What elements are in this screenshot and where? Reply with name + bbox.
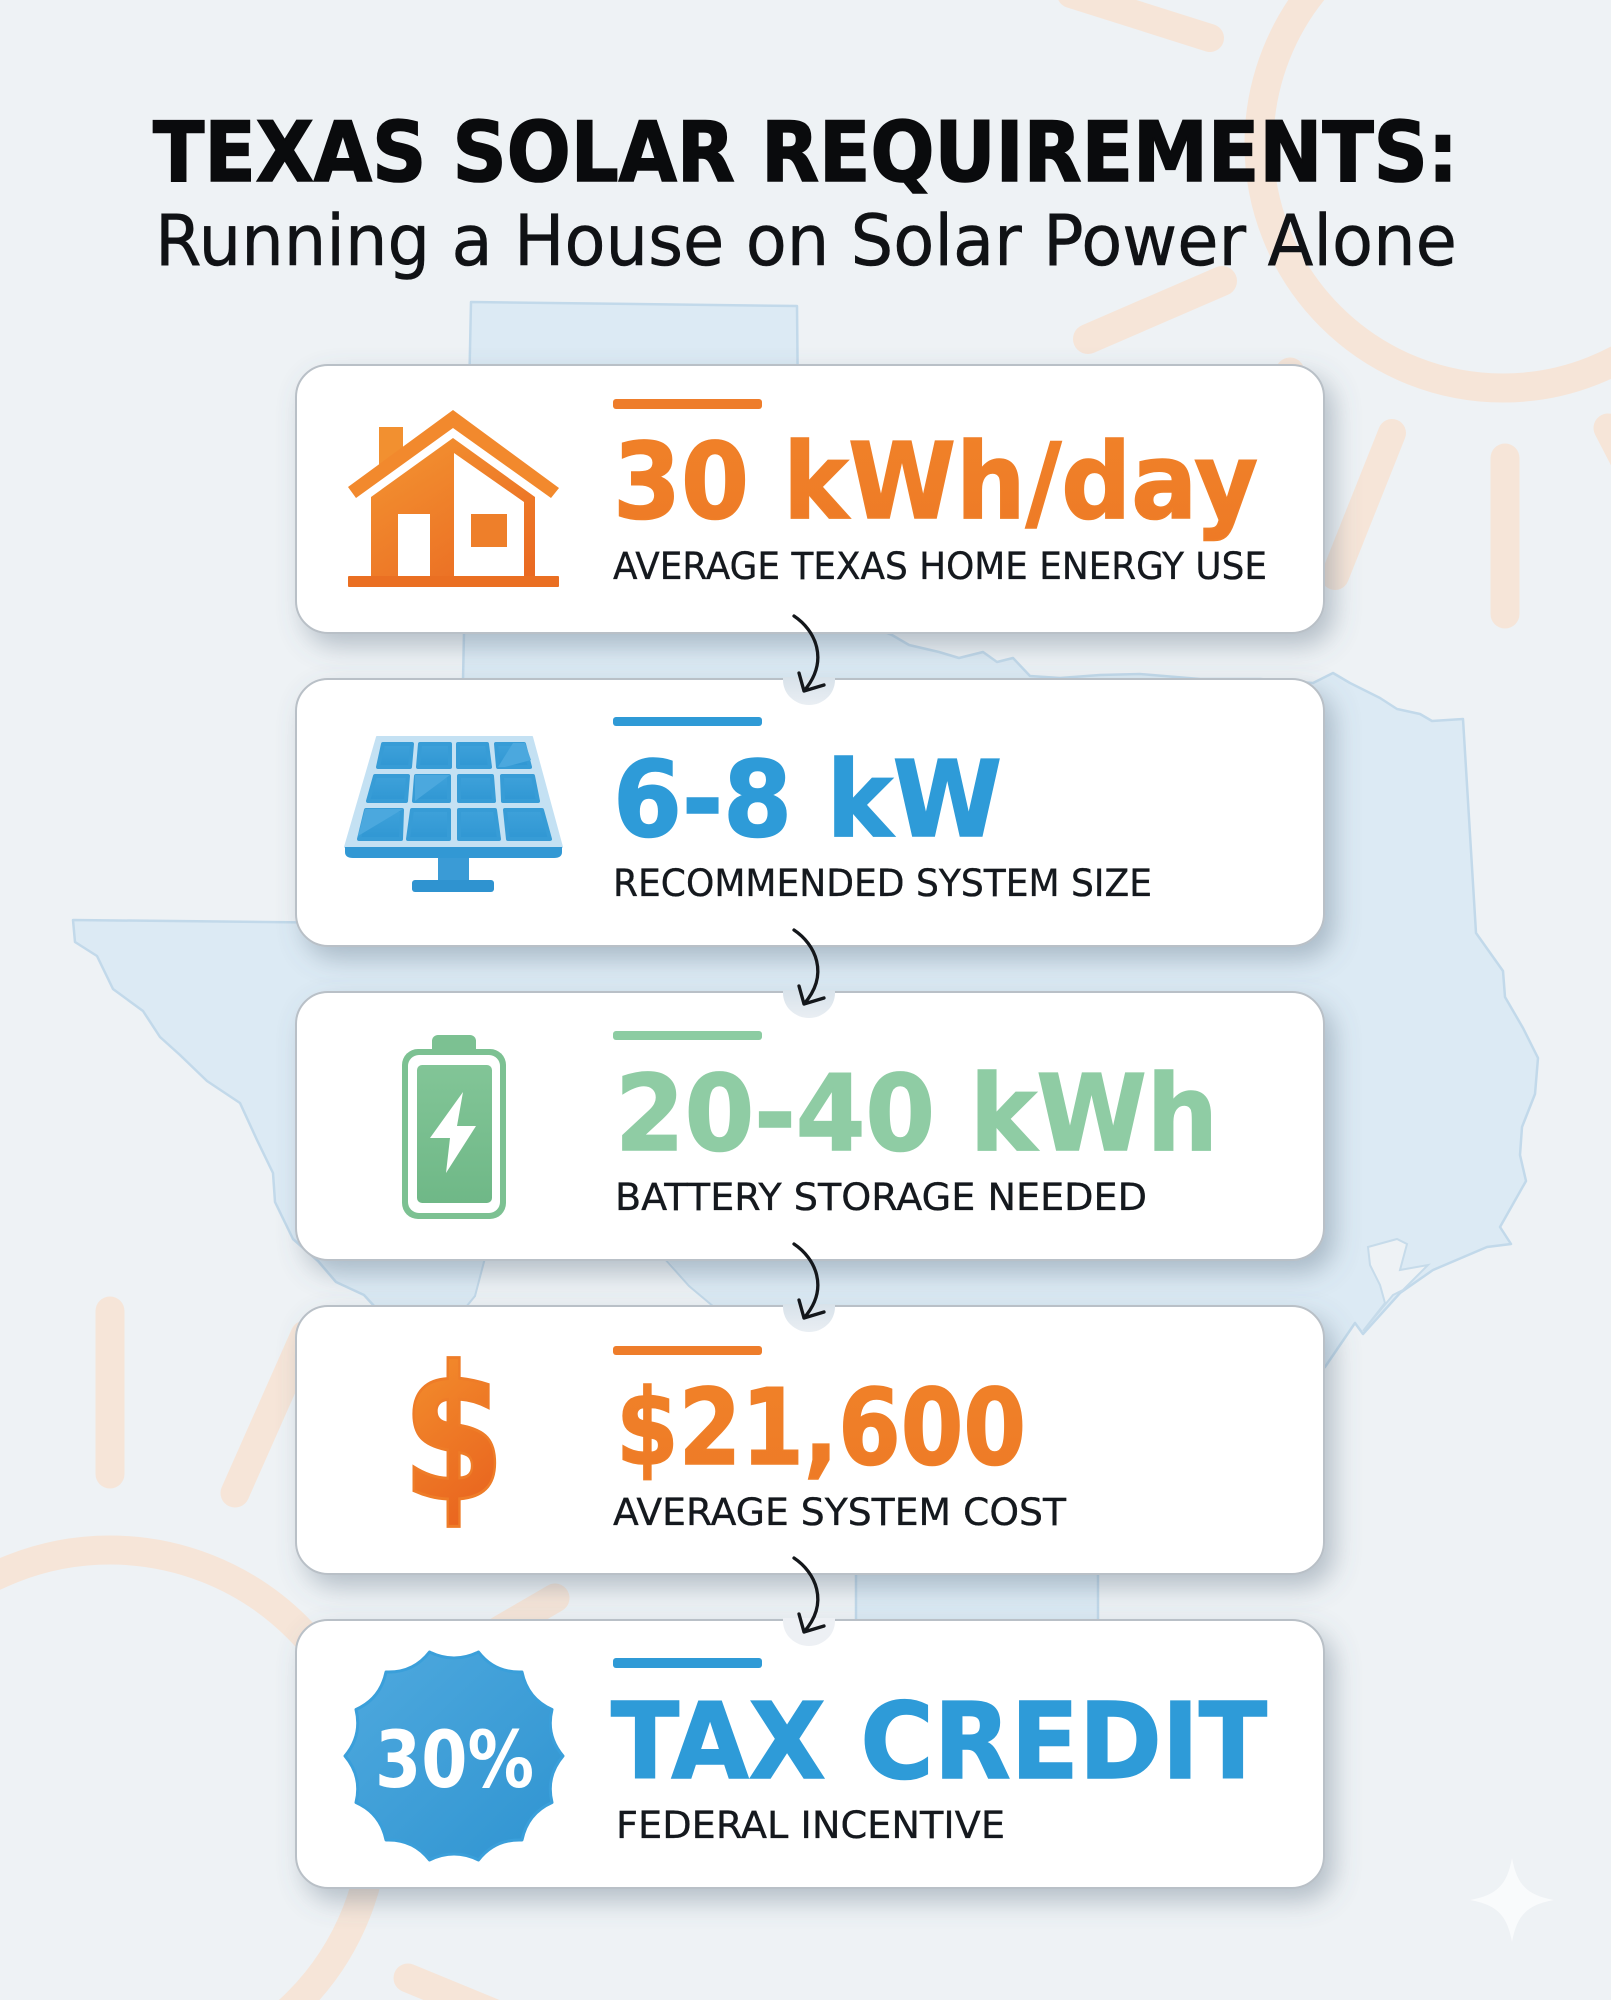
title — [153, 104, 1458, 282]
accent bar — [613, 1031, 762, 1040]
panel: energy use — [296, 365, 1324, 633]
icon: solar panel — [345, 737, 562, 892]
label: AVERAGE TEXAS HOME ENERGY USE — [613, 545, 1267, 588]
connector arrow 1 — [783, 616, 835, 705]
label: RECOMMENDED SYSTEM SIZE — [613, 862, 1152, 905]
accent bar — [613, 399, 762, 409]
title line 2: Running a House on Solar Power Alone — [155, 200, 1457, 282]
accent bar — [613, 1658, 762, 1668]
icon: battery — [402, 1035, 506, 1219]
decorative sun: top right — [1071, 0, 1611, 614]
icon: 30% badge: 30% — [375, 1716, 534, 1806]
watermark sparkle — [1470, 1858, 1554, 1942]
card background — [296, 365, 1324, 633]
title line 1: TEXAS SOLAR REQUIREMENTS: — [153, 104, 1458, 201]
card background — [296, 992, 1324, 1260]
panel: system cost — [296, 1306, 1324, 1574]
panel: system size — [296, 679, 1324, 946]
accent bar — [613, 1346, 762, 1355]
label: BATTERY STORAGE NEEDED — [615, 1176, 1147, 1219]
decorative sun: bottom left — [0, 1311, 555, 2000]
value: 6-8 kW — [613, 739, 1002, 861]
connector arrow 3 — [783, 1244, 835, 1332]
icon: house — [348, 410, 559, 587]
panel: battery storage — [296, 992, 1324, 1260]
connector arrow 4 — [783, 1558, 835, 1646]
value: $21,600 — [616, 1367, 1026, 1489]
panel: tax credit — [296, 1620, 1324, 1888]
card background — [296, 679, 1324, 946]
accent bar — [613, 717, 762, 726]
card background — [296, 1620, 1324, 1888]
label: FEDERAL INCENTIVE — [616, 1804, 1005, 1847]
value: 30 kWh/day — [613, 421, 1258, 543]
card background — [296, 1306, 1324, 1574]
background map: Texas outline — [73, 302, 1538, 1640]
icon: 30% badge — [345, 1652, 563, 1860]
icon: dollar sign: $ — [402, 1326, 505, 1543]
value: 20-40 kWh — [615, 1053, 1218, 1175]
connector arrow 2 — [783, 930, 835, 1018]
value: TAX CREDIT — [611, 1681, 1267, 1803]
label: AVERAGE SYSTEM COST — [613, 1491, 1066, 1534]
